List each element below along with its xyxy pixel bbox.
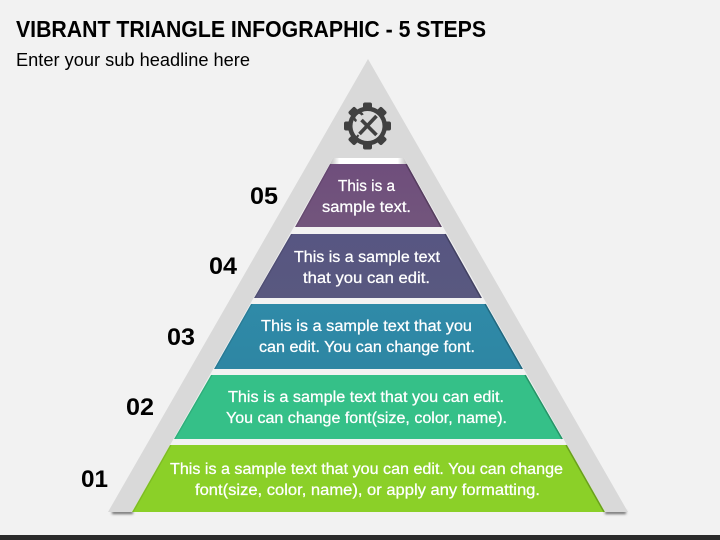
band 05: sample text.: [322, 199, 411, 216]
number 02: 02: [126, 394, 154, 421]
number 03: 03: [167, 324, 195, 351]
number 01: 01: [81, 466, 108, 493]
subtitle: Enter your sub headline here: [16, 50, 250, 70]
band 02: You can change font(size, color, name).: [226, 410, 507, 427]
number 05: 05: [250, 183, 278, 210]
band 05: [295, 164, 442, 227]
band 02: This is a sample text that you can edit.: [228, 389, 504, 406]
pyramid frame: [108, 59, 628, 514]
band 01: font(size, color, name), or apply any formatting.: [195, 482, 540, 499]
band 04: that you can edit.: [303, 270, 430, 287]
band 04: This is a sample text: [294, 249, 441, 266]
title: VIBRANT TRIANGLE INFOGRAPHIC - 5 STEPS: [16, 16, 486, 42]
band 05: This is a: [338, 178, 395, 195]
number 04: 04: [209, 253, 238, 280]
band 03: [214, 304, 523, 369]
band 01: [132, 445, 605, 512]
band 03: This is a sample text that you: [261, 318, 472, 335]
band 04: [254, 234, 482, 298]
footer bar: [0, 535, 720, 540]
band 01: This is a sample text that you can edit. You can change: [170, 461, 563, 478]
band 02: [174, 375, 563, 439]
icon: gear with tools: [344, 102, 391, 150]
band 03: can edit. You can change font.: [259, 339, 475, 356]
